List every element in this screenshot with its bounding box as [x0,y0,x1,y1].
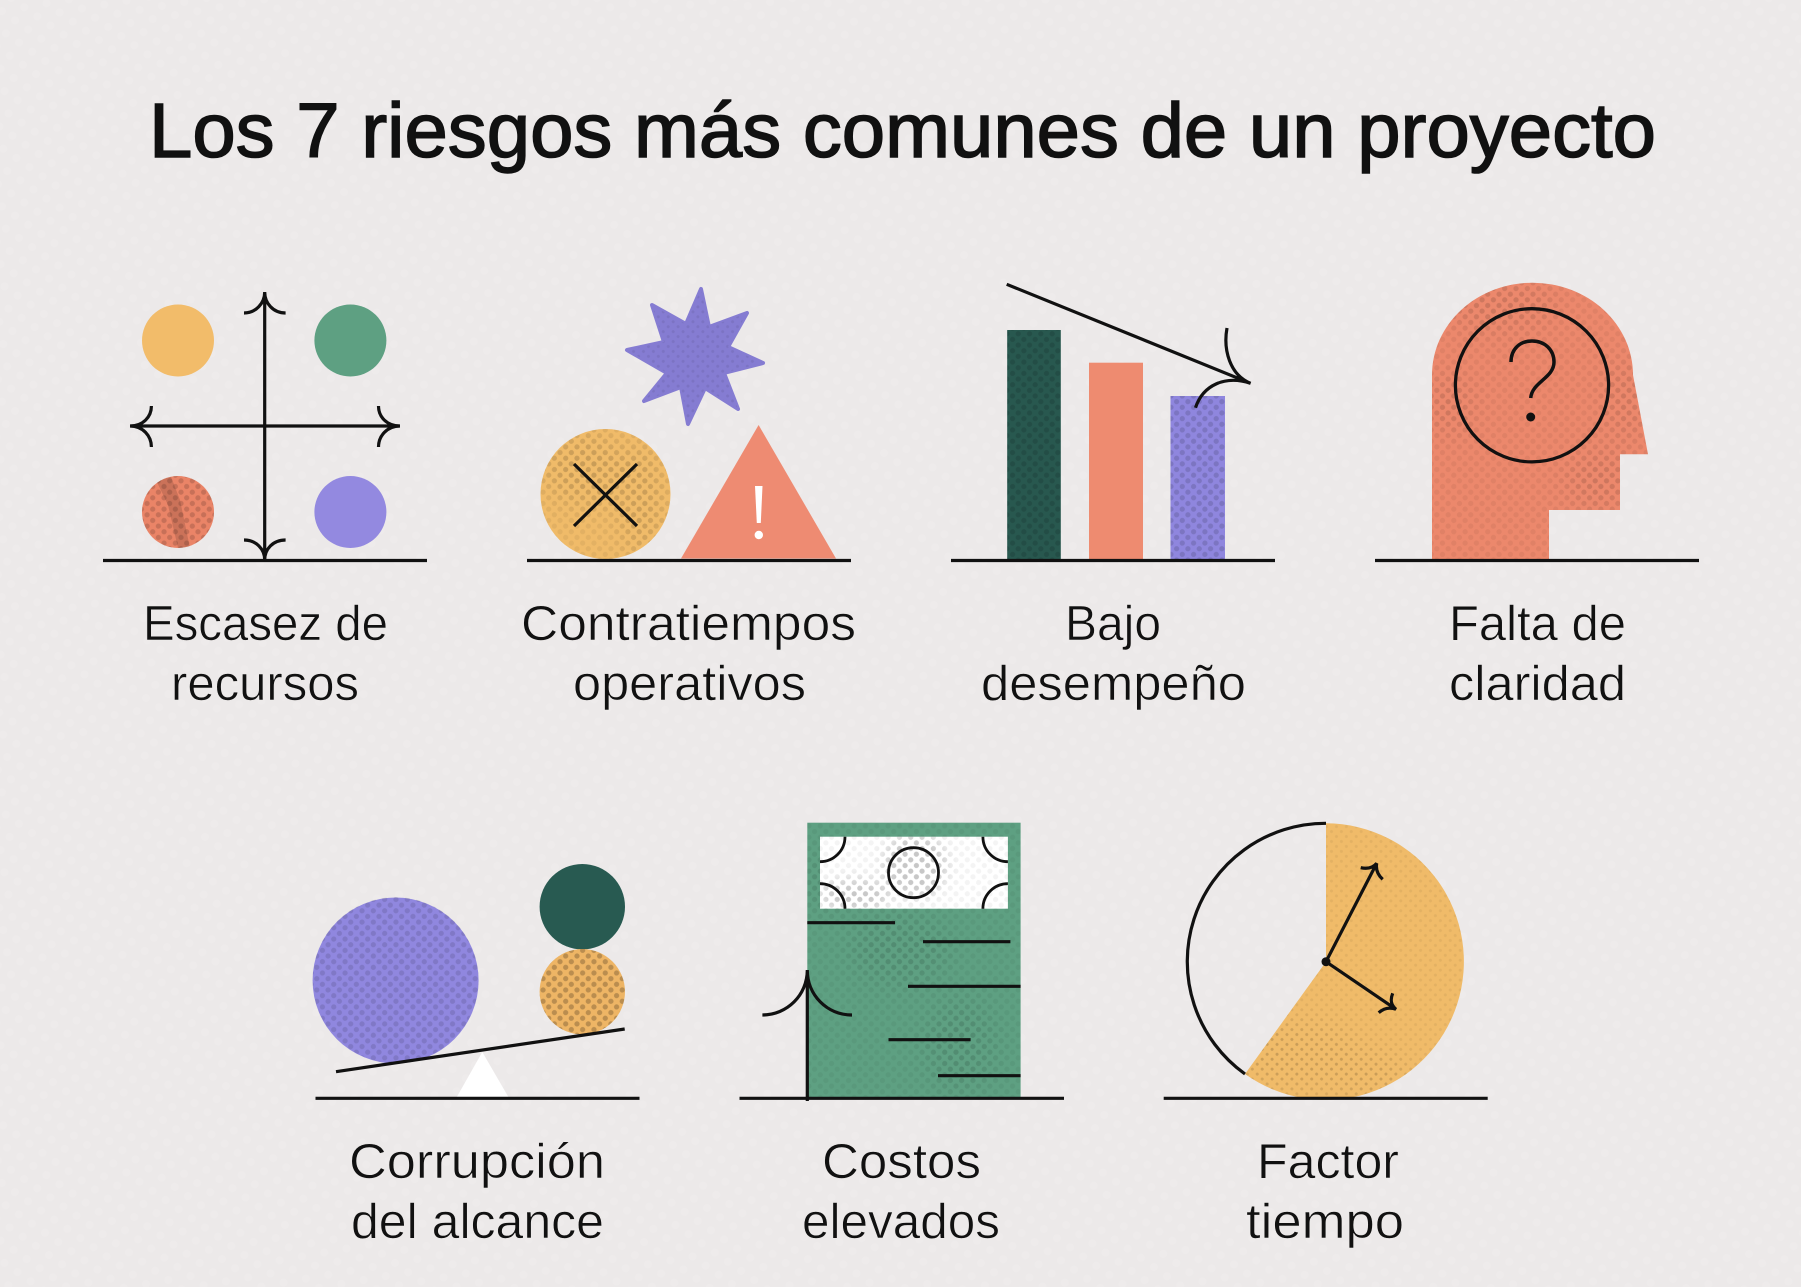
label [802,1135,1000,1249]
ground line [740,1097,1064,1100]
label: operativos [573,657,806,711]
panel: contratiempos operativos [521,280,856,711]
icon: green rising column [807,822,1021,1097]
title: Los 7 riesgos más comunes de un proyecto [149,88,1656,174]
label: Factor [1257,1135,1399,1189]
label [143,597,388,711]
ground line [1375,559,1699,562]
label: Corrupción [349,1135,605,1189]
icon: white fulcrum [457,1052,508,1097]
ground line [316,1097,640,1100]
icon: question mark in circle [1455,309,1609,462]
ground line [527,559,851,562]
icon: gold circle [540,949,625,1034]
label [1246,1135,1404,1249]
panel: factor tiempo [1164,815,1488,1249]
icon: head silhouette [1432,282,1648,559]
label [349,1135,605,1249]
ground line [951,559,1275,562]
icon: banknote [820,836,1008,909]
panel: escasez de recursos [103,292,427,711]
icon: clock hands [1322,863,1396,1013]
panel: falta de claridad [1375,270,1699,711]
bar chart [1007,330,1225,559]
label: Falta de [1449,597,1626,651]
label: Bajo [1065,597,1161,651]
panel: corrupción del alcance [310,864,640,1249]
panel: costos elevados [740,812,1064,1249]
label: recursos [171,657,359,711]
label: claridad [1449,657,1626,711]
icon: purple circle [314,476,386,548]
label [981,597,1246,711]
icon: large purple circle [310,895,480,1065]
ground line [1164,1097,1488,1100]
panel: bajo desempeño [951,284,1275,711]
arrow: vertical axis [244,292,286,560]
icon: green circle [314,304,386,376]
icon: clock pie [1186,822,1464,1100]
seesaw beam [336,1029,625,1072]
label [1449,597,1626,711]
arrow: horizontal axis [130,406,400,447]
label: del alcance [351,1195,604,1249]
label: desempeño [981,657,1246,711]
ground line [103,559,427,562]
icon: warning triangle [681,425,836,558]
icon: star burst [624,286,766,426]
arrow: downward trend [1007,284,1251,408]
label: tiempo [1246,1195,1404,1249]
icon: red circle [142,476,214,548]
label: Contratiempos [521,597,856,651]
icon: yellow circle [142,304,214,376]
arrow: rising cost [762,970,852,1101]
icon: dark green circle [540,864,625,949]
icon: circle with x [540,429,670,559]
icon: ledger lines [807,923,1021,1076]
label: Costos [822,1135,981,1189]
label [521,597,856,711]
label: Escasez de [143,597,388,651]
label: elevados [802,1195,1000,1249]
